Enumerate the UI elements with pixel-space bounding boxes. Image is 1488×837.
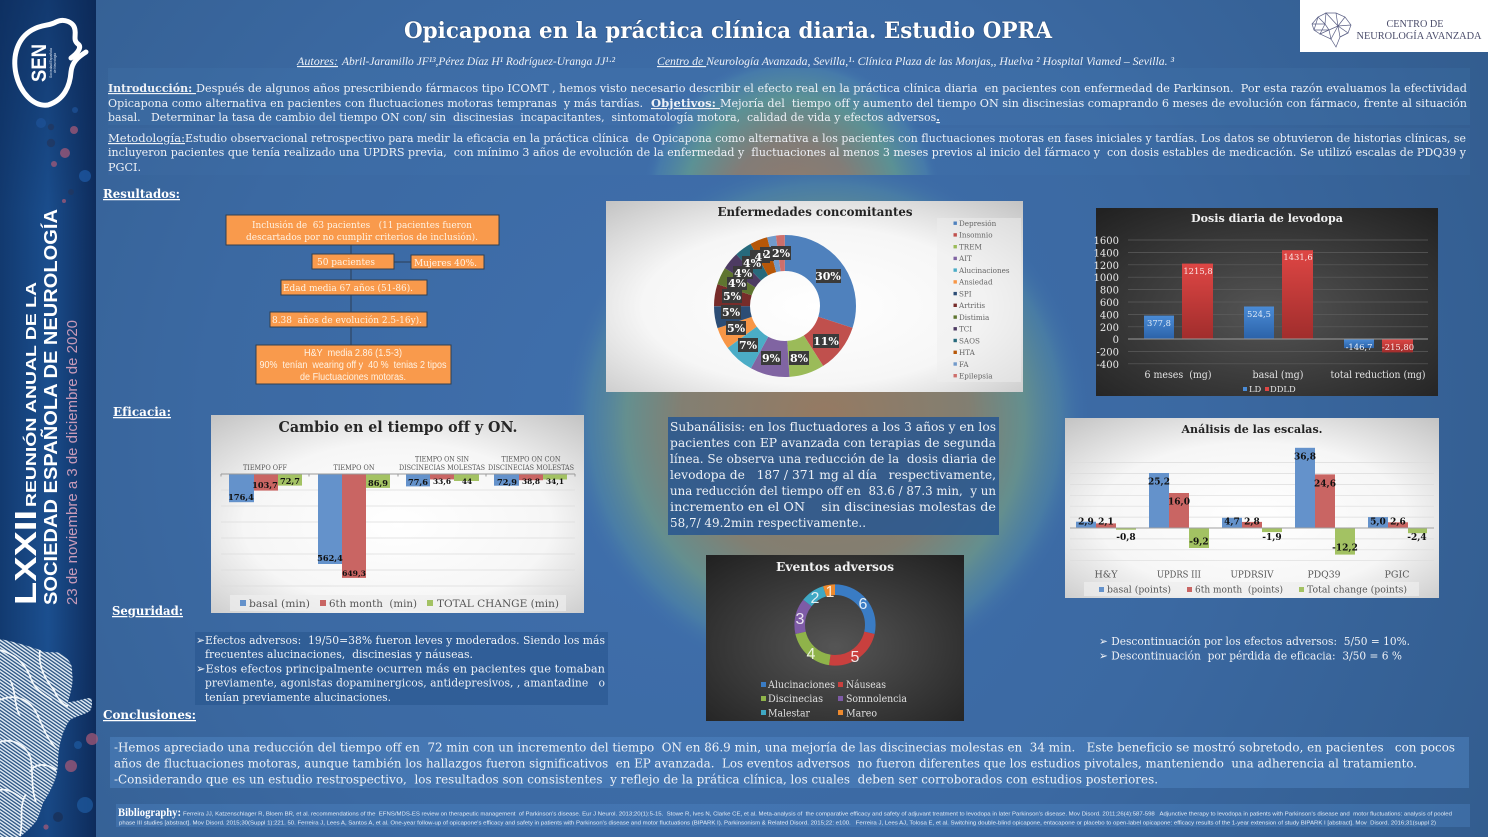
legend: 6th month (points) <box>1195 584 1283 596</box>
text block: subanálisis: incremento en el ON sin discinesias molestas de <box>670 499 996 514</box>
value labels: 36,8 <box>1294 452 1316 462</box>
panel: introduction: Objetivos: <box>651 96 720 110</box>
chart: Análisis de las escalas: Análisis de las escalas. <box>1181 422 1322 436</box>
flowchart: 90% tenían wearing off y 40 % tenias 2 tipos <box>260 360 446 371</box>
chart: Cambio en el tiempo off y ON <box>211 415 584 613</box>
value labels: 34,1 <box>546 477 564 486</box>
chart: Enfermedades concomitantes: 4% <box>728 277 747 290</box>
legend: Discinecias <box>768 694 823 705</box>
title: Opicapona en la práctica clínica diaria. Estudio OPRA <box>404 18 1053 44</box>
legend <box>1243 384 1296 394</box>
flowchart <box>226 215 499 384</box>
panel: introduction <box>108 68 1470 175</box>
data labels: 5 <box>851 649 860 666</box>
category labels: 6 meses (mg) <box>1144 370 1212 381</box>
value labels: -12,2 <box>1332 544 1358 554</box>
decorative dots <box>36 107 98 830</box>
chart: Enfermedades concomitantes: 5% <box>722 306 741 319</box>
value labels: 1215,8 <box>1183 266 1213 276</box>
legend: HTA <box>959 348 976 357</box>
text block: subanálisis <box>668 417 999 535</box>
data labels: 1 <box>826 584 835 601</box>
category labels <box>1144 370 1426 381</box>
value labels: 38,8 <box>522 477 540 486</box>
value labels: 5,0 <box>1370 518 1386 528</box>
chart: Enfermedades concomitantes: Enfermedades concomitantes <box>718 204 912 219</box>
logo: SEN: Sociedad Española <box>49 48 53 78</box>
value labels: 44 <box>462 477 472 486</box>
text block: seguridad: ➢Estos efectos principalmente ocurren más en pacientes que tomaban <box>196 662 606 676</box>
heading: Seguridad: Seguridad: <box>112 603 183 618</box>
text block: subanálisis: levodopa de 187 / 371 mg al día respectivamente, <box>670 467 996 482</box>
value labels: 2,6 <box>1390 518 1406 528</box>
category labels <box>1094 570 1410 580</box>
axis labels: 400 <box>1100 310 1119 321</box>
panel: introduction: Mejoría del tiempo off y aumento del tiempo ON sin discinesias comaprando 6 meses de evolución con fármaco, frente al situación <box>720 96 1468 110</box>
heading: Conclusiones: Conclusiones: <box>103 707 196 722</box>
legend: basal (points) <box>1107 584 1171 596</box>
value labels: -2,4 <box>1407 533 1427 543</box>
value labels: -0,8 <box>1116 533 1136 543</box>
text block: discontinuation: ➢ Descontinuación por los efectos adversos: 5/50 = 10%. <box>1099 634 1410 648</box>
chart: Enfermedades concomitantes: 7% <box>739 339 758 352</box>
chart: Enfermedades concomitantes: 5% <box>723 290 742 303</box>
axis labels: 800 <box>1100 286 1119 297</box>
value labels: -215,80 <box>1382 342 1414 352</box>
axis labels: 1400 <box>1094 248 1119 259</box>
value labels: 86,9 <box>368 478 388 488</box>
chart: Análisis de las escalas <box>1065 418 1439 598</box>
panel: bibliography: phase III studies [abstract]. Mov Disord. 2015;30(Suppl 1):221. 50. Ferreira J, Lees A, Santos A, et al. One-year follow-up of opicapone's efficacy and safety in patients with Parkinson's disease and motor fluctuations (BIPARK I). Parkinsonism & Related Disord. 2015;22: e100. Ferreira J, Lees AJ, Tolosa E, et al. Switching double-blind opicapone, entacapone or placebo to open-label opicapone: efficacy results of the 1-year extension of study BIPARK I [abstract]. Mov Disord. 2016;31(suppl 2) <box>119 820 1436 826</box>
legend: Depresión <box>959 219 997 228</box>
value labels: 377,8 <box>1147 318 1171 328</box>
heading: Resultados: Resultados: <box>103 186 180 201</box>
sidebar title <box>8 209 81 605</box>
axis labels: 1000 <box>1094 273 1119 284</box>
text block: seguridad: ➢Efectos adversos: 19/50=38% fueron leves y moderados. Siendo los más <box>196 633 605 647</box>
value labels: 16,0 <box>1168 498 1190 508</box>
chart: Eventos adversos <box>706 555 964 721</box>
value labels: -146,7 <box>1346 342 1372 352</box>
panel: bibliography <box>116 804 1470 827</box>
legend: Somnolencia <box>846 694 907 705</box>
axis labels: -400 <box>1097 360 1119 371</box>
legend: DDLD <box>1270 384 1296 394</box>
panel: conclusions: -Considerando que es un estudio restrospectivo, los resultados son consistentes y reflejo de la prática clínica, los cuales deben ser corroborados con estudios posteriores. <box>114 772 1158 786</box>
legend: Total change (points) <box>1307 584 1407 596</box>
axis labels: 1200 <box>1094 261 1119 272</box>
chart: Enfermedades concomitantes: 5% <box>727 322 746 335</box>
donut <box>800 590 870 660</box>
category labels <box>243 454 574 472</box>
chart: Dosis diaria de levodopa <box>1094 208 1438 396</box>
authors <box>296 56 1175 68</box>
logo panel: Centro de Neurología Avanzada <box>1300 0 1488 52</box>
axis labels: 200 <box>1100 323 1119 334</box>
flowchart: de Fluctuaciones motoras. <box>300 372 406 383</box>
legend: Artritis <box>958 301 985 310</box>
text block: discontinuation <box>1099 634 1410 662</box>
text block: subanálisis: pacientes con EP avanzada con terapias de segunda <box>670 435 997 450</box>
axis labels <box>1094 236 1119 371</box>
sidebar title: REUNIÓN ANUAL DE LA <box>22 282 40 507</box>
value labels: 2,1 <box>1098 518 1114 528</box>
legend: Náuseas <box>846 679 886 691</box>
sidebar title: 23 de noviembre a 3 de diciembre de 2020 <box>65 320 81 605</box>
chart: Eventos adversos: Eventos adversos <box>776 560 894 574</box>
flowchart: 8.38 años de evolución 2.5-16y). <box>272 315 422 326</box>
legend: TOTAL CHANGE (min) <box>437 598 559 610</box>
panel: introduction: basal. Determinar la tasa de cambio del tiempo ON con/ sin discinesias incapacitantes, sintomatología motora, calidad de vida y efectos adversos. <box>108 110 940 124</box>
chart: Enfermedades concomitantes: 4% <box>743 257 762 270</box>
category labels: total reduction (mg) <box>1330 370 1426 381</box>
legend: SPI <box>959 289 972 298</box>
text block: subanálisis: una reducción del tiempo off en 83.6 / 87.3 min, y un <box>670 483 996 498</box>
legend: TCI <box>959 325 972 334</box>
chart: Enfermedades concomitantes: 30% <box>815 270 841 283</box>
category labels: UPDRS III <box>1157 570 1201 580</box>
authors: Centro de Neurología Avanzada, Sevilla,¹· Clínica Plaza de las Monjas,, Huelva ² Hospital Viamed – Sevilla. ³ <box>657 56 1175 68</box>
value labels: 524,5 <box>1247 309 1271 319</box>
chart: Enfermedades concomitantes: 11% <box>813 335 839 348</box>
value labels: 77,6 <box>408 477 428 487</box>
value labels: 562,4 <box>317 553 343 563</box>
chart: Enfermedades concomitantes: 8% <box>790 352 809 365</box>
legend <box>761 679 907 720</box>
legend: 6th month (min) <box>329 598 417 610</box>
legend: Alucinaciones <box>767 680 835 691</box>
flowchart: H&Y media 2.86 (1.5-3) <box>304 348 402 359</box>
value labels: 2,8 <box>1244 518 1260 528</box>
category labels: TIEMPO ON SIN <box>415 454 469 464</box>
logo panel: Centro de Neurología Avanzada: NEUROLOGÍA AVANZADA <box>1356 30 1482 42</box>
text block: seguridad <box>195 632 608 705</box>
legend: Alucinaciones <box>958 266 1010 275</box>
value labels <box>1078 452 1427 554</box>
category labels: TIEMPO OFF <box>243 463 287 472</box>
legend <box>1084 582 1419 596</box>
logo: SEN: de Neurología <box>53 53 57 73</box>
category labels: UPDRSIV <box>1230 570 1274 580</box>
value labels: 176,4 <box>228 492 254 502</box>
panel: conclusions <box>110 737 1469 788</box>
panel: introduction: Opicapona como alternativa en pacientes con fluctuaciones motoras tempranas y más tardías. <box>108 96 643 110</box>
panel: introduction: Introducción: <box>108 81 196 95</box>
text block: subanálisis: línea. Se observa una reducción de la dosis diaria de <box>670 451 996 466</box>
panel: conclusions: años de fluctuaciones motoras, aunque también los hallazgos fueron significativos en EP avanzada. Los eventos adversos no fueron diferentes que los estudios pivotales, manteniendo una adherencia al tratamiento. <box>114 756 1417 770</box>
panel: methodology: Metodología: <box>108 131 185 145</box>
category labels: DISCINECIAS MOLESTAS <box>399 463 485 472</box>
panel: methodology <box>108 131 1466 174</box>
text block: subanálisis: Subanálisis: en los fluctuadores a los 3 años y en los <box>670 419 996 434</box>
category labels: PDQ39 <box>1308 570 1340 580</box>
legend: Epilepsia <box>959 372 993 380</box>
category labels: PGIC <box>1384 570 1410 580</box>
data labels: 3 <box>796 611 805 628</box>
data labels: 2 <box>811 590 820 607</box>
axis labels: -200 <box>1097 348 1119 359</box>
illustration: brain <box>0 639 92 837</box>
text block: seguridad: previamente, agonistas dopaminergicos, antidepresivos, , amantadine o <box>205 676 605 690</box>
axis labels: 600 <box>1100 298 1119 309</box>
legend: Mareo <box>846 708 877 720</box>
value labels: 25,2 <box>1148 478 1170 488</box>
data labels <box>796 584 868 666</box>
value labels: 24,6 <box>1314 480 1336 490</box>
heading: Eficacia: Eficacia: <box>113 404 171 419</box>
icon: network brain <box>1312 13 1351 47</box>
panel: bibliography: Ferreira JJ, Katzenschlager R, Bloem BR, et al. recommendations of the EFNS/MDS-ES review on therapeutic management of Parkinson's disease. Eur J Neurol. 2013;20(1):5-15. Stowe R, Ives N, Clarke CE, et al. Meta-analysis of the comparative efficacy and safety of adjuvant treatment to levodopa in later Parkinson's disease. Mov Disord. 2011;26(4):587-598 Adjunctive therapy to levodopa in patients with Parkinson's disease and motor fluctuations: analysis of pooled <box>183 812 1452 818</box>
bars <box>221 474 575 578</box>
data labels: 6 <box>859 596 868 613</box>
legend: TREM <box>959 242 982 252</box>
flowchart: 50 pacientes <box>317 257 375 268</box>
authors: Abril-Jaramillo JF¹³,Pérez Díaz H¹ Rodríguez-Uranga JJ¹·² <box>341 56 616 68</box>
category labels: H&Y <box>1094 570 1118 580</box>
legend: FA <box>959 360 969 369</box>
legend <box>230 595 566 611</box>
value labels <box>1147 252 1414 352</box>
legend: AIT <box>958 254 972 263</box>
text block: subanálisis: 58,7/ 49.2min respectivamente.. <box>670 515 866 530</box>
flowchart: Mujeres 40%. <box>414 258 477 269</box>
value labels: -9,2 <box>1189 538 1209 548</box>
data labels <box>721 246 841 365</box>
legend: Insomnio <box>959 231 993 240</box>
legend: Distimia <box>959 313 990 322</box>
legend: basal (min) <box>249 598 310 610</box>
value labels: 2,9 <box>1078 518 1094 528</box>
value labels: 72,7 <box>280 476 300 486</box>
logo: SEN: SEN <box>28 44 51 82</box>
flowchart: Inclusión de 63 pacientes (11 pacientes fueron <box>252 220 472 231</box>
category labels: TIEMPO ON <box>334 463 374 472</box>
legend <box>937 218 1021 382</box>
chart: Enfermedades concomitantes: 2 <box>763 248 771 261</box>
value labels: 33,6 <box>433 477 451 486</box>
flowchart: Edad media 67 años (51-86). <box>283 283 413 294</box>
sidebar title: SOCIEDAD ESPAÑOLA DE NEUROLOGÍA <box>40 209 61 605</box>
panel: methodology: PGCI. <box>108 160 141 174</box>
bars <box>1128 250 1428 352</box>
axis labels: 0 <box>1113 335 1119 346</box>
text block: seguridad: frecuentes alucinaciones, discinesias y náuseas. <box>205 647 473 661</box>
category labels: DISCINECIAS MOLESTAS <box>488 463 574 472</box>
value labels: 649,3 <box>342 569 366 578</box>
chart: Cambio en el tiempo off y ON: Cambio en el tiempo off y ON. <box>278 418 518 436</box>
chart: Enfermedades concomitantes <box>606 201 1023 392</box>
text block: seguridad: tenían previamente alucinaciones. <box>205 690 391 704</box>
value labels: 103,7 <box>252 480 278 490</box>
text block: discontinuation: ➢ Descontinuación por pérdida de eficacia: 3/50 = 6 % <box>1099 648 1402 662</box>
flowchart: descartados por no cumplir criterios de inclusión). <box>246 232 478 243</box>
donut <box>732 253 838 359</box>
legend: Malestar <box>768 708 810 720</box>
chart: Enfermedades concomitantes: 4% <box>734 267 753 280</box>
data labels: 4 <box>807 646 816 663</box>
value labels: 72,9 <box>497 477 517 487</box>
value labels: 1431,6 <box>1283 252 1313 262</box>
legend: Ansiedad <box>958 278 993 287</box>
legend: LD <box>1249 384 1262 394</box>
logo: SEN <box>15 20 86 105</box>
axis labels: 1600 <box>1094 236 1119 247</box>
chart: Enfermedades concomitantes: 4' <box>754 251 766 264</box>
chart: Dosis diaria de levodopa: Dosis diaria de levodopa <box>1191 211 1344 225</box>
sidebar title: LXXII <box>8 510 43 605</box>
logo panel: Centro de Neurología Avanzada: CENTRO DE <box>1386 19 1444 30</box>
category labels: basal (mg) <box>1252 370 1304 381</box>
panel: introduction: Después de algunos años prescribiendo fármacos tipo ICOMT , hemos visto necesario describir el efecto real en la práctica clínica diaria en pacientes con enfermedad de Parkinson. Por esta razón evaluamos la efectividad <box>196 81 1468 95</box>
value labels: -1,9 <box>1262 533 1282 543</box>
panel: bibliography: Bibliography: <box>118 807 181 819</box>
chart: Enfermedades concomitantes: 2% <box>772 247 791 260</box>
category labels: TIEMPO ON CON <box>502 454 560 464</box>
legend: SAOS <box>959 336 980 345</box>
panel: conclusions: -Hemos apreciado una reducción del tiempo off en 72 min con un incremento del tiempo ON en 86.9 min, una mejoría de las discinecias molestas en 34 min. Este beneficio se mostró sobretodo, en pacientes con pocos <box>114 740 1455 754</box>
value labels <box>228 476 564 578</box>
bars <box>1070 448 1434 555</box>
panel: sidebar <box>0 0 98 837</box>
chart: Enfermedades concomitantes: 9% <box>762 352 781 365</box>
value labels: 4,7 <box>1224 518 1240 528</box>
authors: Autores: <box>296 56 338 68</box>
